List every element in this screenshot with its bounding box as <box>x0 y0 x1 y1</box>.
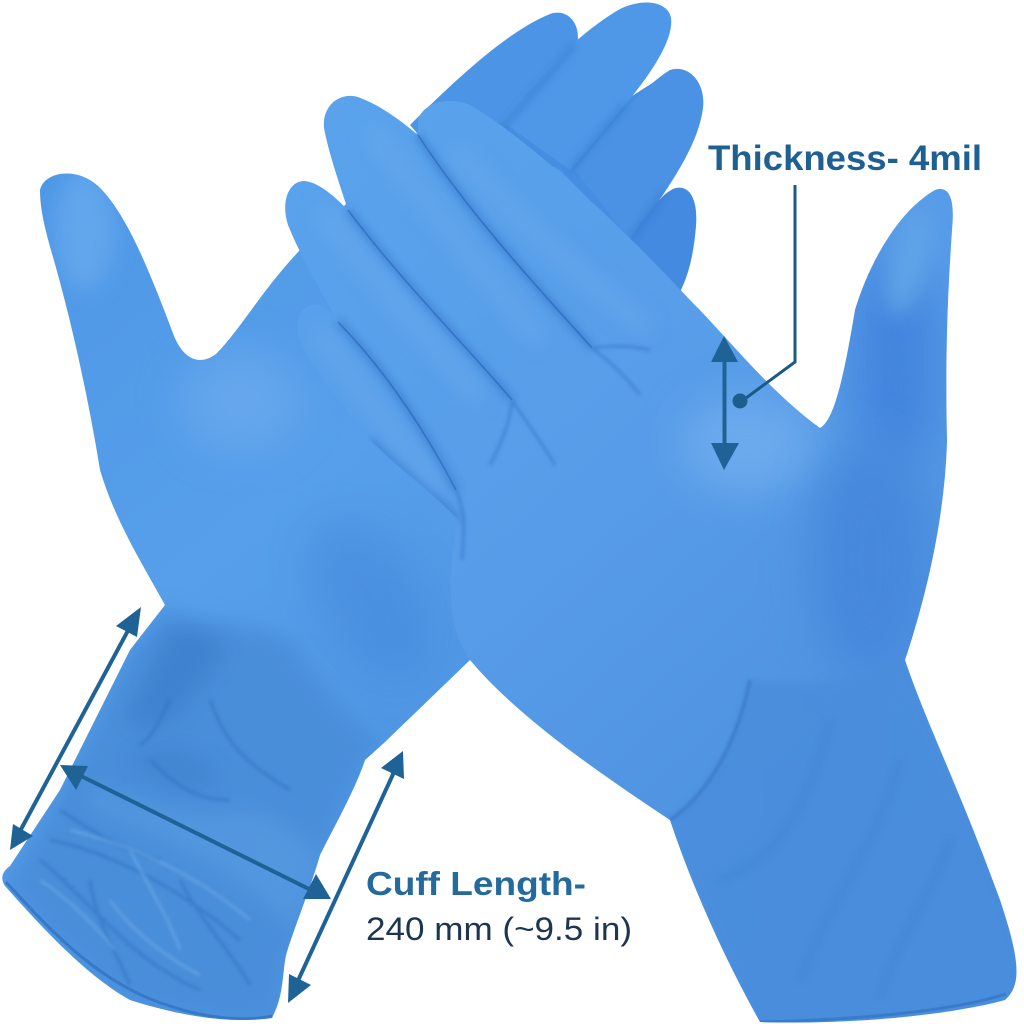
right cuff <box>670 660 1016 1023</box>
left glove hand and thumb <box>2 110 680 1020</box>
arrow: cuff length left <box>10 607 141 850</box>
left glove shading <box>55 45 664 703</box>
right glove hand and fingers <box>285 96 1016 1023</box>
left glove fingers behind <box>410 3 703 292</box>
annotation: cuff length label <box>366 865 632 947</box>
palm wrinkles <box>456 346 650 560</box>
left glove (behind) <box>2 3 703 1020</box>
arrow: cuff width <box>60 765 331 899</box>
annotation: thickness label: Thickness- 4mil <box>708 139 982 178</box>
right glove (front) <box>285 96 1016 1023</box>
annotation: cuff length label: Cuff Length- <box>366 865 586 902</box>
annotation: thickness leader line <box>732 185 795 408</box>
left glove cuff <box>5 610 385 1020</box>
right glove shading <box>318 130 1016 1023</box>
finger creases <box>338 135 592 520</box>
annotation: cuff length label: 240 mm (~9.5 in) <box>366 911 632 947</box>
arrow: cuff length right <box>288 751 404 1003</box>
arrow: thickness <box>711 336 739 470</box>
